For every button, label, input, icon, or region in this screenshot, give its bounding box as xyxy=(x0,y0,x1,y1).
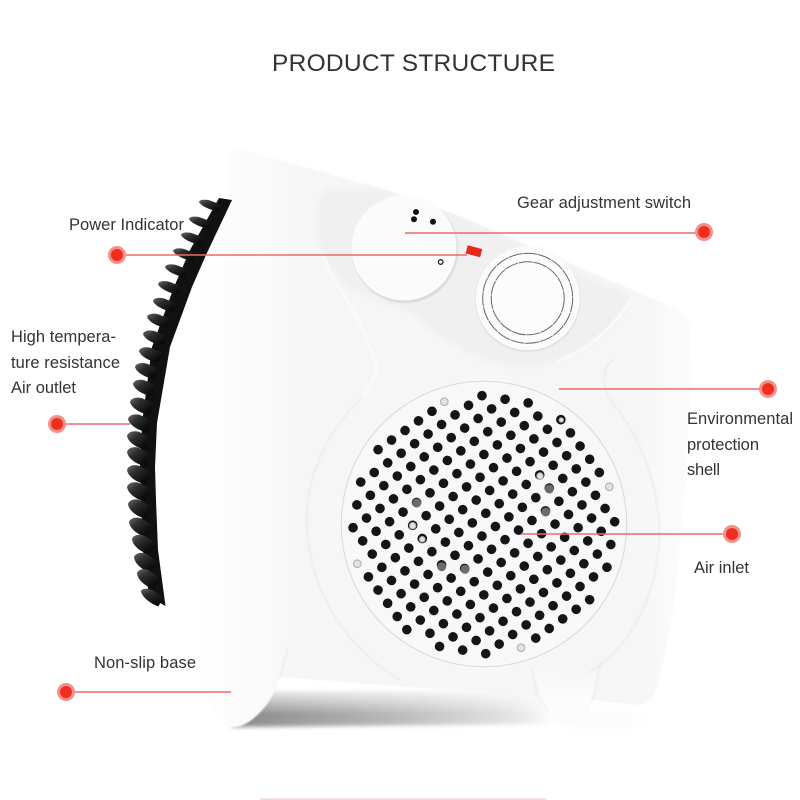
label: protection xyxy=(687,436,759,454)
red power indicator xyxy=(466,245,482,257)
label: Air outlet xyxy=(11,379,76,397)
grille disk xyxy=(341,381,627,667)
marker dot xyxy=(698,226,710,238)
label: Non-slip base xyxy=(94,654,196,672)
callout: gear adjustment switch xyxy=(405,194,713,241)
shadow fade xyxy=(220,680,570,714)
marker dot xyxy=(111,249,123,261)
body shell xyxy=(155,149,691,727)
label: Air inlet xyxy=(694,559,749,577)
leader line xyxy=(117,254,467,256)
knob base xyxy=(476,246,580,350)
leader line xyxy=(559,388,768,390)
shell contour lines xyxy=(280,360,659,700)
marker halo xyxy=(108,246,126,264)
bottom accent line xyxy=(260,798,546,800)
label: shell xyxy=(687,461,720,479)
floor shadow xyxy=(220,680,645,727)
label: Power Indicator xyxy=(69,216,184,234)
marker halo xyxy=(48,415,66,433)
title: PRODUCT STRUCTURE xyxy=(272,50,555,77)
knob shadow xyxy=(475,247,580,352)
marker dot xyxy=(762,383,774,395)
leader line xyxy=(57,423,130,425)
heater body xyxy=(229,167,661,728)
label: Environmental xyxy=(687,410,793,428)
air inlet grille xyxy=(311,352,657,698)
grille holes xyxy=(311,352,657,698)
fin spine xyxy=(140,198,232,606)
label: ture resistance xyxy=(11,354,120,372)
gear dial xyxy=(352,196,458,303)
thermostat knob xyxy=(475,246,580,352)
callout: high temperature resistance air outlet xyxy=(11,328,130,433)
dial ring mark xyxy=(438,260,443,264)
shadow core xyxy=(232,690,555,727)
marker halo xyxy=(57,683,75,701)
knob rings xyxy=(483,253,573,343)
label: High tempera- xyxy=(11,328,116,346)
marker halo xyxy=(723,525,741,543)
label: Gear adjustment switch xyxy=(517,194,691,212)
control recess xyxy=(316,187,633,367)
leader line xyxy=(66,691,231,693)
dial face xyxy=(352,196,456,300)
marker dot xyxy=(60,686,72,698)
leader line xyxy=(405,232,704,234)
callout: non-slip base xyxy=(57,654,231,701)
leader line xyxy=(521,533,732,535)
marker halo xyxy=(759,380,777,398)
callout: environmental protection shell xyxy=(559,380,798,479)
marker dot xyxy=(726,528,738,540)
air outlet fins xyxy=(125,198,232,607)
dial dots xyxy=(413,209,419,215)
callout: power indicator xyxy=(69,216,467,264)
callout: air inlet xyxy=(521,525,749,577)
marker dot xyxy=(51,418,63,430)
dial shadow xyxy=(352,197,458,303)
shell highlights xyxy=(322,252,633,397)
right foot xyxy=(532,667,598,723)
grille screws and partly blocked holes xyxy=(354,398,613,652)
shadow right xyxy=(555,714,645,726)
marker halo xyxy=(695,223,713,241)
grey blocked holes xyxy=(412,484,554,574)
